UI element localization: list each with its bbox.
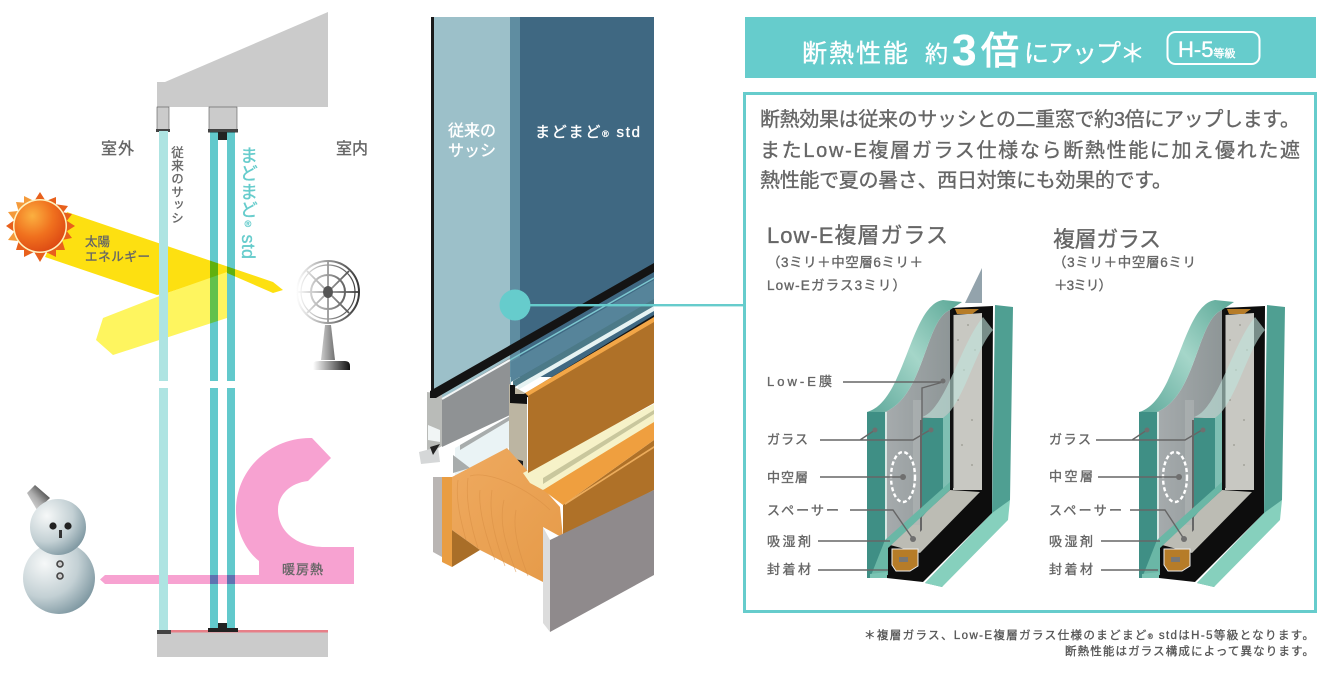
- cream sill: [523, 404, 654, 490]
- left black edge: [431, 17, 434, 395]
- badge: H-5 grade: [1168, 32, 1260, 64]
- panel: description and glass types: [744, 94, 1316, 612]
- icon: fan: [297, 261, 359, 370]
- wood end-grain face: [452, 448, 563, 582]
- banner: [745, 17, 1316, 78]
- icon: sun: [6, 192, 75, 262]
- vertical label: madomado std: まどまど ® std: [238, 146, 258, 259]
- labels and leaders: Low-E: [767, 374, 946, 577]
- icon: snowman: [23, 485, 95, 614]
- label: solar energy: エネルギー: [85, 250, 150, 264]
- label: heating heat: 暖房熱: [282, 562, 323, 577]
- labels and leaders: double: [1049, 428, 1206, 577]
- labels and leaders: Low-E: スペーサー: [767, 503, 839, 518]
- description text: またLow-E複層ガラス仕様なら断熱性能に加え優れた遮: [760, 139, 1300, 162]
- black inner rail: [524, 315, 654, 398]
- Low-E film spike: [965, 268, 982, 303]
- labels and leaders: double: スペーサー: [1049, 503, 1122, 518]
- callout connector: [500, 290, 745, 320]
- heading: double glazing: （3ミリ＋中空層6ミリ: [1053, 255, 1196, 270]
- labels and leaders: Low-E: ガラス: [767, 432, 808, 447]
- labels and leaders: Low-E: 吸湿剤: [767, 534, 811, 549]
- inner glass: [520, 17, 654, 377]
- inner glass pair: [210, 132, 235, 629]
- label: conventional sash: 従来の: [448, 122, 496, 140]
- banner heading: [802, 26, 1145, 75]
- heading: Low-E glass: Low-Eガラス3ミリ）: [767, 278, 906, 293]
- vertical label: conventional sash: 従来のサッシ: [169, 146, 183, 224]
- labels and leaders: Low-E: 中空層: [767, 470, 808, 485]
- heading: double glazing: ＋3ミリ）: [1054, 278, 1112, 293]
- labels and leaders: double: 中空層: [1049, 469, 1093, 484]
- left wall: [433, 477, 480, 567]
- label: outdoor: 室外: [101, 140, 134, 158]
- description text: 断熱効果は従来のサッシとの二重窓で約3倍にアップします。: [760, 108, 1300, 131]
- heading: double glazing: 複層ガラス: [1053, 227, 1161, 252]
- label: indoor: 室内: [336, 140, 368, 158]
- description text: [760, 108, 1300, 192]
- overlap strip: [510, 17, 521, 377]
- label: madomado std: まどまど® std: [535, 124, 640, 141]
- label: solar energy: 太陽: [85, 234, 110, 249]
- banner heading: 断熱性能: [802, 40, 908, 68]
- labels and leaders: double: ガラス: [1049, 432, 1091, 447]
- banner heading: 倍: [981, 31, 1019, 73]
- label: conventional sash: [448, 122, 496, 160]
- glass unit: Low-E: [867, 268, 1013, 587]
- black rail: [430, 263, 654, 398]
- banner heading: 約: [925, 41, 948, 67]
- description text: 熱性能で夏の暑さ、西日対策にも効果的です。: [760, 169, 1172, 192]
- heading: double glazing: [1053, 227, 1196, 293]
- label: conventional sash: サッシ: [448, 143, 496, 160]
- outer glass: [159, 131, 168, 631]
- banner heading: 3: [952, 26, 976, 75]
- badge: H-5 grade: H-5等級: [1178, 37, 1235, 62]
- solar beam direct: [45, 212, 283, 295]
- inner sash end: [508, 384, 527, 473]
- panel: 3D window section: [419, 17, 654, 632]
- wood grain: [457, 475, 550, 576]
- heading: Low-E glass: [767, 223, 948, 293]
- footnote: 断熱性能はガラス構成によって異なります。: [1065, 644, 1314, 658]
- right wall: [543, 490, 654, 632]
- footnote: [864, 628, 1314, 658]
- footnote: ＊複層ガラス、Low-E複層ガラス仕様のまどまど® stdはH-5等級となります。: [864, 628, 1314, 642]
- labels and leaders: double: 吸湿剤: [1049, 534, 1093, 549]
- wood panel: [525, 317, 654, 473]
- panel: left cross-section diagram: [6, 12, 368, 657]
- heading: Low-E glass: Low-E複層ガラス: [767, 223, 948, 248]
- roof / head frame: [157, 12, 328, 107]
- labels and leaders: Low-E: 封着材: [767, 562, 811, 577]
- glass unit: double: [1139, 300, 1285, 587]
- outer glass: [433, 17, 511, 400]
- banner heading: にアップ＊: [1024, 40, 1145, 68]
- inner sash head: [208, 107, 238, 140]
- floor sill: [157, 623, 328, 657]
- heating heat arrow: [100, 438, 354, 584]
- labels and leaders: Low-E: Low-E膜: [767, 374, 832, 389]
- outer sash frame: [419, 358, 510, 476]
- outer sash head: [156, 107, 170, 132]
- label: solar energy: [85, 234, 150, 264]
- inner glass strips: [442, 278, 654, 399]
- solar beam reflected: [96, 272, 227, 355]
- lower wood rail: [563, 440, 654, 538]
- labels and leaders: double: 封着材: [1049, 562, 1093, 577]
- heading: Low-E glass: （3ミリ＋中空層6ミリ＋: [767, 255, 923, 270]
